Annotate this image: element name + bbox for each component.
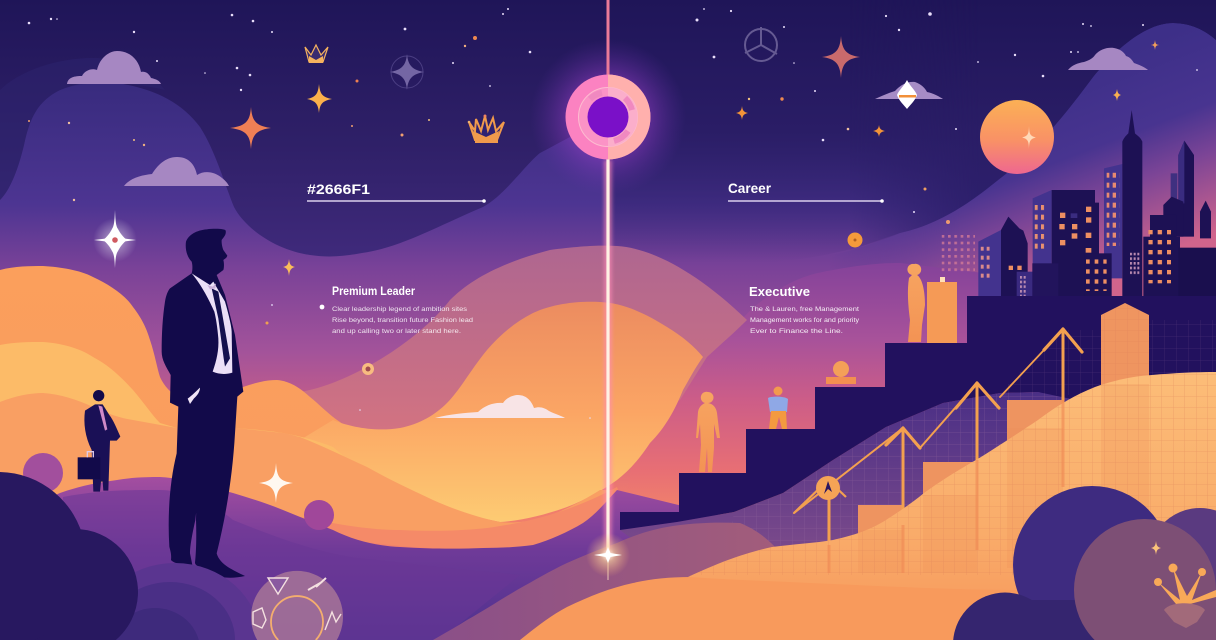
bar 1: [858, 505, 903, 575]
bar 3: [1007, 400, 1063, 570]
text block executive: The & Lauren, free Management: [750, 306, 859, 313]
right indigo to pink hill behind city: [930, 23, 1216, 296]
sparkle on right hill top: [1151, 40, 1159, 50]
large leader silhouette: [162, 229, 245, 578]
bar 4 grid: [1101, 303, 1149, 400]
bottom left dark clouds: [0, 472, 260, 640]
person with blue shirt: [768, 386, 788, 429]
dark night sky left of orb: [0, 0, 608, 256]
orange grid hill: [688, 372, 1216, 640]
cloud middle left: [124, 157, 229, 186]
distant stars: [28, 8, 1198, 419]
text block premium leader: and up calling two or later stand here.: [332, 328, 461, 335]
translucent mauve hill: [300, 246, 747, 460]
ground decorative circle right: [304, 500, 334, 530]
tall spire tower: [1104, 110, 1142, 297]
text block premium leader: Rise beyond, transition future Fashion lead: [332, 317, 473, 324]
ring star icon left: [390, 54, 424, 90]
lower orange hill: [0, 393, 617, 540]
ring emblem icon right: [745, 27, 777, 61]
small cup on podium: [940, 277, 945, 282]
bottom orange hill: [520, 577, 1216, 640]
purple foreground ground: [0, 477, 740, 640]
text block executive: Ever to Finance the Line.: [750, 328, 843, 335]
sparkle orange small left: [736, 106, 748, 120]
moon: [980, 100, 1054, 174]
beam base flare: [586, 533, 630, 577]
chart grid over hill: [688, 372, 1216, 577]
heading left code label: #2666F1: [307, 182, 371, 197]
magenta hill centre right: [620, 263, 1000, 530]
heading right career label: Career: [728, 181, 772, 196]
crown icon bottom right: [1154, 564, 1216, 628]
sparkle on right hill: [1113, 89, 1121, 101]
sparkle small gold: [283, 259, 295, 276]
central white cloud: [435, 395, 565, 418]
heading right rule: [728, 199, 884, 203]
central orb: [566, 74, 650, 160]
sparkle large coral: [230, 107, 271, 149]
sparkle yellow: [307, 84, 332, 113]
sparkle orange small right: [873, 125, 885, 137]
navy staircase and base: [620, 296, 1216, 530]
trophy on pedestal: [826, 361, 856, 384]
purple grid hill under stairs: [620, 390, 1100, 600]
office tower centre: [1033, 190, 1099, 297]
text block executive: Executive: [749, 284, 810, 299]
orange coin left: [362, 363, 374, 375]
cloud with diamond icon: [875, 80, 943, 109]
text block premium leader: [320, 286, 473, 335]
sparkle on cloud: [1151, 541, 1161, 555]
small man with briefcase: [78, 390, 120, 492]
text block premium leader: Premium Leader: [332, 286, 415, 298]
cloud top left: [67, 51, 161, 84]
left yellow hill layer: [0, 342, 360, 470]
bottom right navy clouds: [953, 486, 1216, 640]
podium block: [927, 282, 957, 343]
central orange blob: [300, 302, 703, 522]
shirt: [192, 273, 232, 374]
sparkle white with red centre: [93, 210, 137, 268]
person standing lower step: [696, 392, 720, 472]
orb glow: [530, 39, 686, 195]
person standing upper step: [907, 264, 925, 342]
city skyline: [942, 110, 1216, 308]
bar 4 tower: [1101, 303, 1149, 510]
dark sky edge reinforcement right: [870, 23, 1216, 242]
right cluster towers: [1143, 141, 1216, 297]
arrow badge with figure: [794, 476, 846, 513]
orange coin upper right: [848, 232, 862, 248]
crown large: [468, 114, 504, 143]
bars seen through hill: [858, 384, 1149, 573]
left orange hill: [0, 266, 400, 540]
pocket square: [188, 388, 200, 404]
faint outer hill edge: [0, 58, 165, 200]
lower mauve hill: [433, 523, 900, 640]
tie: [212, 288, 230, 367]
darker ground ridge: [60, 490, 520, 640]
bar 2: [923, 462, 977, 572]
low foreground blocks: [1017, 253, 1112, 308]
sparkle pink: [822, 36, 860, 78]
text block executive: Management works for and priority: [750, 317, 860, 324]
ground decorative circle left: [23, 453, 63, 493]
heading left rule: [307, 199, 486, 203]
arrow stems seen through hill: [829, 400, 1063, 573]
bow accent: [207, 283, 216, 289]
text block premium leader: Clear leadership legend of ambition sites: [332, 306, 468, 313]
text block executive: [749, 284, 860, 335]
faint grid on navy background: [1000, 320, 1216, 395]
vertical beam upper: [606, 0, 610, 78]
salmon valley band: [290, 487, 625, 549]
vertical light beam lower: [604, 158, 612, 580]
crown small: [305, 45, 328, 63]
gem ring emblem: [251, 571, 343, 640]
building with pitched roof: [978, 217, 1028, 297]
cloud top right: [1068, 48, 1148, 70]
sparkle white lower: [259, 463, 293, 503]
dark night sky right of orb: [608, 0, 1216, 262]
rising arrows: [794, 329, 1082, 573]
faded far building windows: [942, 235, 975, 275]
